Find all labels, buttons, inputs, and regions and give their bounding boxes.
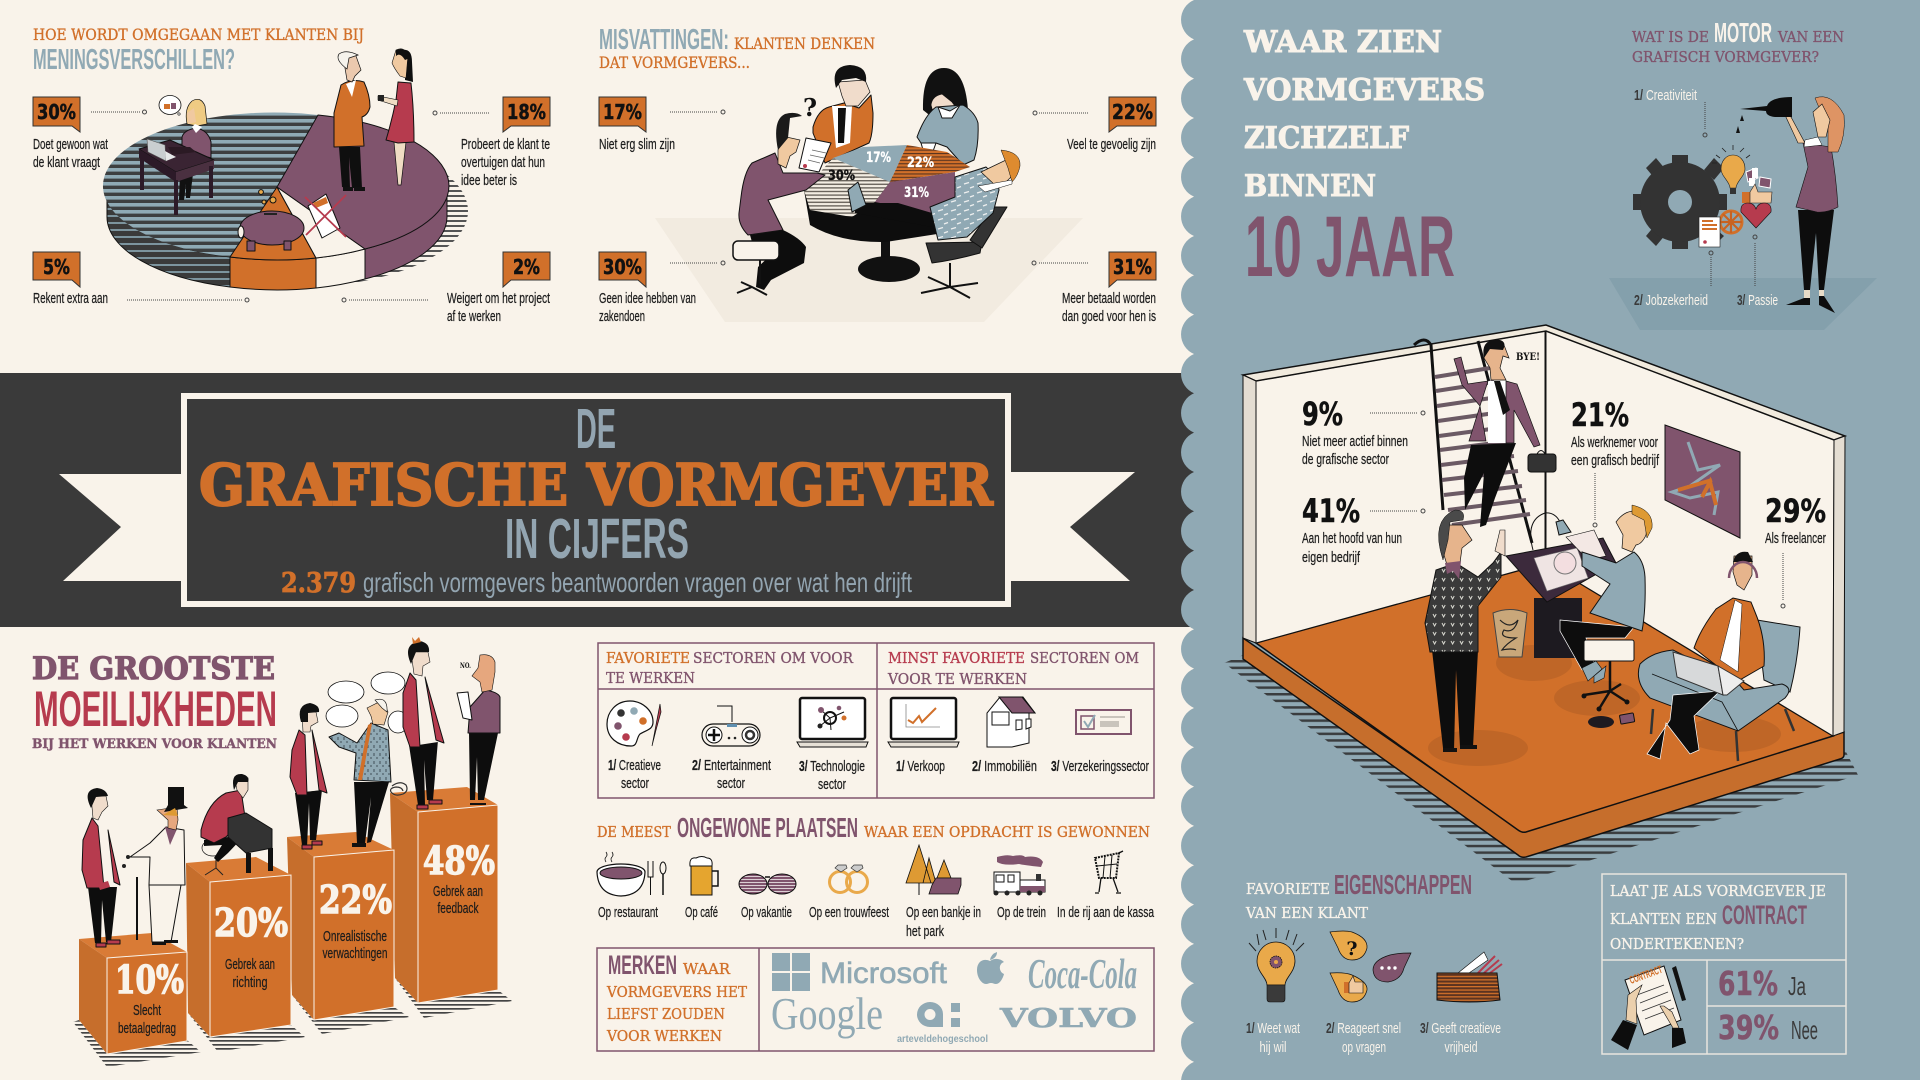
icon: crossed-out contract xyxy=(305,194,346,238)
figure: left man with document xyxy=(733,93,831,295)
panel: rechterkant blauw xyxy=(1181,0,1920,1080)
heading: minst favoriete sectoren xyxy=(887,649,1139,688)
heading: waar zien vormgevers zichzelf binnen 10 jaar: WAAR ZIEN xyxy=(1243,25,1442,60)
text: doet gewoon wat de klant vraagt: de klant vraagt xyxy=(33,154,101,171)
stat: 39 percent nee: 39% xyxy=(1718,1008,1779,1047)
heading: favoriete sectoren: FAVORIETE xyxy=(606,649,690,667)
scalloped background xyxy=(1181,0,1920,1080)
heading: favoriete sectoren: SECTOREN OM VOOR xyxy=(693,649,854,667)
badge: 30 percent xyxy=(599,252,646,287)
figure: woman in blue sweater xyxy=(917,68,978,165)
subtitle: grafisch vormgevers beantwoorden vragen over wat hen drijft xyxy=(363,567,912,598)
heading: misvattingen: MISVATTINGEN: xyxy=(599,24,729,56)
21 percent stat: een grafisch bedrijf xyxy=(1571,452,1660,469)
room: isometric office xyxy=(1224,325,1858,884)
text: weigert om het project af te werken: af te werken xyxy=(447,308,501,325)
41 percent stat xyxy=(1302,492,1402,566)
text: geen idee hebben van zakendoen: Geen idee hebben van xyxy=(599,290,696,307)
badge: 30 percent: 30% xyxy=(603,255,642,279)
bar: 20 percent gebrek aan richting: Gebrek aan xyxy=(225,956,275,973)
labels: ongewone plaatsen: Op vakantie xyxy=(741,904,792,921)
logo: microsoft xyxy=(772,953,948,991)
callout leaders xyxy=(670,110,1088,265)
heading: waar zien vormgevers zichzelf binnen 10 jaar: BINNEN xyxy=(1244,169,1376,204)
badge: 5 percent xyxy=(33,252,80,287)
heading: misvattingen xyxy=(599,24,875,72)
labels: ongewone plaatsen: Op café xyxy=(685,904,718,921)
icon: signing contract xyxy=(1611,964,1686,1050)
banner band xyxy=(0,373,1200,627)
floor shadows xyxy=(1428,645,1781,766)
heading: merken: LIEFST ZOUDEN xyxy=(607,1005,725,1023)
bar: 10 percent slecht betaalgedrag: betaalgedrag xyxy=(118,1020,176,1037)
icon: signing contract: CONTRACT xyxy=(1628,964,1664,987)
badge: 17 percent xyxy=(599,97,646,132)
floor shape xyxy=(1609,278,1877,330)
bar: 20 percent gebrek aan richting xyxy=(186,857,291,1037)
panel: sectoren xyxy=(598,643,1154,798)
labels: eigenschappen: 2/ Reageert snel xyxy=(1326,1020,1401,1037)
icon: beer mug xyxy=(690,856,718,895)
icon: trees and park bench xyxy=(906,845,961,895)
bar: 22 percent onrealistische verwachtingen xyxy=(287,832,394,1020)
badge: 22 percent xyxy=(1109,97,1156,132)
icon: shopping cart xyxy=(1095,851,1123,893)
labels: minst favoriete sectoren xyxy=(896,758,1149,775)
block shadows xyxy=(73,978,512,1067)
heading: contract vraag: ONDERTEKENEN? xyxy=(1610,935,1744,953)
armchair xyxy=(1638,620,1800,761)
21 percent stat: Als werknemer voor xyxy=(1571,434,1658,451)
labels: favoriete sectoren: sector xyxy=(621,775,649,792)
9 percent stat: Niet meer actief binnen xyxy=(1302,433,1408,450)
labels: favoriete sectoren: sector xyxy=(717,775,745,792)
9 percent stat: de grafische sector xyxy=(1302,451,1389,468)
41 percent stat: eigen bedrijf xyxy=(1302,549,1361,566)
heading: favoriete eigenschappen xyxy=(1245,869,1472,922)
figure: man in red jacket paying xyxy=(82,788,120,947)
bar: 20 percent gebrek aan richting: 20% xyxy=(214,900,288,945)
text: doet gewoon wat de klant vraagt xyxy=(33,136,109,171)
logo: artevelde hogeschool xyxy=(897,1002,988,1045)
poster xyxy=(1665,425,1740,538)
text: geen idee hebben van zakendoen: zakendoen xyxy=(599,308,645,325)
text: veel te gevoelig zijn: Veel te gevoelig zijn xyxy=(1067,136,1156,153)
figure: reclining man on chair xyxy=(848,150,1020,298)
heading: contract vraag: LAAT JE ALS VORMGEVER JE xyxy=(1610,882,1826,900)
badge: 31 percent: 31% xyxy=(1113,255,1152,279)
labels: favoriete sectoren: sector xyxy=(818,776,846,793)
icon: sunglasses xyxy=(739,874,796,894)
heading: merken: WAAR xyxy=(683,960,731,978)
29 percent stat: Als freelancer xyxy=(1765,530,1826,547)
icon: thumb and money cards xyxy=(1742,168,1772,203)
29 percent stat xyxy=(1765,492,1826,547)
text: geen idee hebben van zakendoen xyxy=(599,290,696,325)
labels: favoriete sectoren: 1/ Creatieve xyxy=(608,757,661,774)
icon: gear xyxy=(1633,155,1727,249)
labels: motor: 1/ Creativiteit xyxy=(1634,87,1698,104)
text: niet erg slim zijn: Niet erg slim zijn xyxy=(599,136,675,153)
icon: bulb with gear xyxy=(1249,928,1304,1002)
badge: 31 percent xyxy=(1109,252,1156,287)
bar: 10 percent slecht betaalgedrag: Slecht xyxy=(133,1002,162,1019)
heading: misvattingen: DAT VORMGEVERS... xyxy=(599,54,750,72)
table with pie chart: 17% xyxy=(866,150,891,166)
icon: speech bubbles question thumb dots: ? xyxy=(1346,938,1358,960)
text: meer betaald worden: dan goed voor hen is xyxy=(1062,308,1156,325)
bar: 10 percent slecht betaalgedrag xyxy=(79,933,187,1054)
heading: favoriete eigenschappen: EIGENSCHAPPEN xyxy=(1334,869,1472,900)
callout leaders xyxy=(91,110,489,302)
text: meer betaald worden: Meer betaald worden xyxy=(1062,290,1156,307)
figure: seated man at black desk xyxy=(201,774,273,875)
box frame xyxy=(598,643,1154,798)
heading: waar zien vormgevers zichzelf binnen 10 jaar: VORMGEVERS xyxy=(1243,73,1485,108)
figure: left man with document: ? xyxy=(803,93,817,122)
heading: merken: VOOR WERKEN xyxy=(606,1027,722,1045)
heading: favoriete eigenschappen: VAN EEN KLANT xyxy=(1245,904,1368,922)
table with pie chart: 22% xyxy=(907,155,934,171)
heading: merken xyxy=(606,950,747,1045)
figure: woman at desk xyxy=(139,96,214,215)
icon: palette xyxy=(607,701,661,746)
figure: woman in red dress xyxy=(378,49,414,185)
icon: light bulb xyxy=(1712,145,1750,194)
labels: ongewone plaatsen: Op een bankje in xyxy=(906,904,981,921)
icon: laptop technology xyxy=(797,698,868,747)
labels: motor: 2/ Jobzekerheid xyxy=(1634,292,1708,309)
icon: document xyxy=(1699,217,1720,247)
floor shape xyxy=(655,218,1083,322)
labels: eigenschappen xyxy=(1246,1020,1501,1056)
figure: man climbing ladder: BYE! xyxy=(1516,352,1540,363)
heading: contract vraag: KLANTEN EEN xyxy=(1610,910,1717,928)
ribbon left xyxy=(59,474,181,581)
figure: man covering face in red jacket xyxy=(290,703,327,849)
heading: motor van een grafisch vormgever: VAN EEN xyxy=(1777,28,1844,46)
icon: speech bubbles question thumb dots xyxy=(1330,931,1411,1002)
heading: meningsverschillen: MENINGSVERSCHILLEN? xyxy=(33,44,235,76)
panel: hoe wordt omgegaan met klanten xyxy=(33,26,551,325)
logo: google: Google xyxy=(771,988,883,1039)
41 percent stat: 41% xyxy=(1302,492,1360,530)
labels: motor: 3/ Passie xyxy=(1737,292,1778,309)
text: probeert de klant te overtuigen: idee beter is xyxy=(461,172,517,189)
ribbon right xyxy=(1010,472,1135,581)
panel: misvattingen xyxy=(599,24,1156,325)
heading: ongewone plaatsen: WAAR EEN OPDRACHT IS GEWONNEN xyxy=(864,823,1150,841)
logo: apple xyxy=(977,952,1004,984)
heading: ongewone plaatsen xyxy=(597,812,1150,843)
text: doet gewoon wat de klant vraagt: Doet gewoon wat xyxy=(33,136,109,153)
labels: favoriete sectoren xyxy=(608,757,865,793)
heading: contract vraag: CONTRACT xyxy=(1722,900,1807,930)
subtitle: 2.379 xyxy=(281,568,356,599)
title frame xyxy=(184,396,1008,604)
logo: microsoft: Microsoft xyxy=(820,957,948,990)
text: rekent extra aan: Rekent extra aan xyxy=(33,290,108,307)
heading: waar zien vormgevers zichzelf binnen 10 jaar: ZICHZELF xyxy=(1244,121,1409,156)
21 percent stat: 21% xyxy=(1571,396,1629,434)
figure: rich man in white suit with top hat xyxy=(122,787,188,945)
labels: eigenschappen: 3/ Geeft creatieve xyxy=(1420,1020,1501,1037)
heading: de grootste moeilijkheden: BIJ HET WERKEN VOOR KLANTEN xyxy=(32,737,277,752)
panel: ongewone plaatsen xyxy=(597,812,1154,940)
panel: contract xyxy=(1602,874,1846,1054)
badge: 17 percent: 17% xyxy=(603,100,642,124)
heading: contract vraag xyxy=(1610,882,1826,953)
heading: de grootste moeilijkheden: MOEILIJKHEDEN xyxy=(34,681,277,737)
stat: 61 percent ja: 61% xyxy=(1718,964,1778,1003)
text: weigert om het project af te werken: Weigert om het project xyxy=(447,290,551,307)
labels: ongewone plaatsen: het park xyxy=(906,923,944,940)
icon: wedding rings xyxy=(830,865,868,892)
figure: tall man in red jacket xyxy=(391,637,444,809)
bar: 48 percent gebrek aan feedback xyxy=(390,787,498,1003)
figure: freelancer with laptop xyxy=(1647,552,1764,759)
badge: 18 percent xyxy=(503,97,550,132)
badge: 2 percent: 2% xyxy=(513,255,540,279)
labels: minst favoriete sectoren: 2/ Immobiliën xyxy=(972,758,1037,775)
41 percent stat: Aan het hoofd van hun xyxy=(1302,530,1402,547)
panel: merken xyxy=(597,948,1154,1051)
labels: ongewone plaatsen: In de rij aan de kassa xyxy=(1057,904,1154,921)
pie chart: omgang met klanten xyxy=(103,113,468,290)
figure: man with sweater xyxy=(1425,510,1505,752)
labels: favoriete sectoren: 2/ Entertainment xyxy=(692,757,772,774)
labels: motor xyxy=(1634,87,1778,309)
figure: man in orange coat xyxy=(334,52,370,191)
icon: oil can xyxy=(1736,97,1792,133)
heading: misvattingen: KLANTEN DENKEN xyxy=(734,35,875,53)
heading: favoriete eigenschappen: FAVORIETE xyxy=(1246,880,1330,898)
heading: merken: MERKEN xyxy=(608,950,677,980)
labels: minst favoriete sectoren: 1/ Verkoop xyxy=(896,758,945,775)
icon: laptop sales chart xyxy=(888,698,959,747)
heading: waar zien vormgevers zichzelf binnen 10 jaar: 10 JAAR xyxy=(1245,199,1455,295)
drawing desk xyxy=(1506,513,1616,658)
badge: 18 percent: 18% xyxy=(507,100,546,124)
room shadow stripes xyxy=(1224,655,1858,884)
table with pie chart: 31% xyxy=(904,185,929,201)
labels: favoriete sectoren: 3/ Technologie xyxy=(799,758,865,775)
labels: minst favoriete sectoren: 3/ Verzekeringssector xyxy=(1051,758,1149,775)
9 percent stat xyxy=(1302,395,1408,468)
box frame xyxy=(597,948,1154,1051)
heading: motor van een grafisch vormgever: GRAFISCH VORMGEVER? xyxy=(1632,48,1819,66)
stat: 61 percent ja: Ja xyxy=(1788,971,1806,1001)
heading: motor van een grafisch vormgever: MOTOR xyxy=(1714,17,1772,48)
9 percent stat: 9% xyxy=(1302,395,1343,433)
stat: 39 percent nee: Nee xyxy=(1791,1015,1818,1045)
heading: de grootste moeilijkheden: DE GROOTSTE xyxy=(32,651,275,687)
icon: restaurant bowl xyxy=(597,852,666,896)
icon: heart xyxy=(1741,203,1771,228)
title: de grafische vormgever in cijfers xyxy=(199,397,994,571)
logo: volvo: VOLVO xyxy=(999,1004,1137,1034)
labels: ongewone plaatsen: Op restaurant xyxy=(598,904,659,921)
speech bubbles xyxy=(326,672,408,733)
logo: artevelde hogeschool: arteveldehogeschool xyxy=(897,1034,988,1045)
box frame xyxy=(1602,874,1846,1054)
logo: coca-cola: Coca-Cola xyxy=(1028,952,1137,998)
bar: 48 percent gebrek aan feedback: feedback xyxy=(438,900,479,917)
heading: ongewone plaatsen: DE MEEST xyxy=(597,823,671,841)
bar: 10 percent slecht betaalgedrag: 10% xyxy=(115,957,184,1002)
title: de grafische vormgever in cijfers: DE xyxy=(576,397,616,461)
heading: meningsverschillen: HOE WORDT OMGEGAAN MET KLANTEN BIJ xyxy=(33,26,364,44)
bar: 22 percent onrealistische verwachtingen: verwachtingen xyxy=(322,945,388,962)
icon: orange wheel xyxy=(1720,211,1742,233)
heading: ongewone plaatsen: ONGEWONE PLAATSEN xyxy=(677,812,858,843)
29 percent stat: 29% xyxy=(1765,492,1826,530)
table with pie chart: 30% xyxy=(828,168,855,184)
heading: waar zien vormgevers zichzelf binnen 10 jaar xyxy=(1243,25,1485,295)
icon: pencil case xyxy=(1437,952,1502,1002)
text: weigert om het project af te werken xyxy=(447,290,551,325)
icon: house xyxy=(987,697,1035,747)
bar: 22 percent onrealistische verwachtingen: Onrealistische xyxy=(323,928,387,945)
callout leaders xyxy=(1703,102,1757,287)
heading: minst favoriete sectoren: MINST FAVORIETE xyxy=(888,649,1025,667)
labels: eigenschappen: op vragen xyxy=(1342,1039,1386,1056)
heading: meningsverschillen xyxy=(33,26,364,76)
figure: designer on stool xyxy=(1560,505,1652,712)
icon: piggy bank xyxy=(238,190,304,251)
heading: merken: VORMGEVERS HET xyxy=(606,983,747,1001)
bar: 48 percent gebrek aan feedback: Gebrek aan xyxy=(433,883,483,900)
figure: bald man with paper saying no: NO. xyxy=(460,661,471,670)
figure: middle man in orange jacket xyxy=(813,65,873,163)
heading: minst favoriete sectoren: VOOR TE WERKEN xyxy=(887,670,1027,688)
heading: de grootste moeilijkheden xyxy=(32,651,277,752)
bar: 48 percent gebrek aan feedback: 48% xyxy=(423,838,495,883)
coffee spill xyxy=(1588,713,1635,728)
labels: eigenschappen: 1/ Weet wat xyxy=(1246,1020,1301,1037)
figure: man climbing ladder xyxy=(1454,340,1556,527)
title: de grafische vormgever in cijfers: IN CIJFERS xyxy=(505,507,689,571)
figure: woman with oil can xyxy=(1785,97,1844,313)
labels: eigenschappen: hij wil xyxy=(1260,1039,1286,1056)
labels: ongewone plaatsen xyxy=(598,904,1154,940)
labels: eigenschappen: vrijheid xyxy=(1444,1039,1478,1056)
text: probeert de klant te overtuigen xyxy=(461,136,550,189)
badge: 5 percent: 5% xyxy=(43,255,70,279)
21 percent stat xyxy=(1571,396,1660,469)
badge: 30 percent xyxy=(33,97,80,132)
heading: favoriete sectoren xyxy=(606,649,854,687)
icon: insurance checkbox xyxy=(1076,710,1131,734)
heading: favoriete sectoren: TE WERKEN xyxy=(606,669,695,687)
heading: motor van een grafisch vormgever xyxy=(1632,17,1844,66)
figure: bald man with paper saying no xyxy=(457,655,500,805)
figure: man in patterned shirt xyxy=(329,699,391,847)
title: de grafische vormgever in cijfers: GRAFISCHE VORMGEVER xyxy=(199,452,994,519)
text: probeert de klant te overtuigen: overtuigen dat hun xyxy=(461,154,545,171)
table with pie chart xyxy=(804,145,970,282)
subtitle xyxy=(281,567,912,599)
icon: train xyxy=(994,855,1045,896)
bar: 20 percent gebrek aan richting: richting xyxy=(232,974,268,991)
text: probeert de klant te overtuigen: Probeert de klant te xyxy=(461,136,550,153)
heading: minst favoriete sectoren: SECTOREN OM xyxy=(1030,649,1139,667)
badge: 2 percent xyxy=(503,252,550,287)
icon: waste basket xyxy=(1493,610,1527,657)
icon: game controller xyxy=(702,706,760,746)
text: meer betaald worden xyxy=(1062,290,1156,325)
labels: ongewone plaatsen: Op een trouwfeest xyxy=(809,904,890,921)
room base and floor xyxy=(1243,563,1844,857)
labels: ongewone plaatsen: Op de trein xyxy=(997,904,1046,921)
callout leaders xyxy=(1370,411,1785,608)
heading: motor van een grafisch vormgever: WAT IS DE xyxy=(1632,28,1709,46)
badge: 22 percent: 22% xyxy=(1112,100,1153,124)
badge: 30 percent: 30% xyxy=(37,100,76,124)
room walls xyxy=(1243,325,1845,736)
ladder xyxy=(1414,340,1532,543)
panel: de grootste moeilijkheden xyxy=(32,637,512,1067)
bar: 22 percent onrealistische verwachtingen: 22% xyxy=(319,877,392,922)
